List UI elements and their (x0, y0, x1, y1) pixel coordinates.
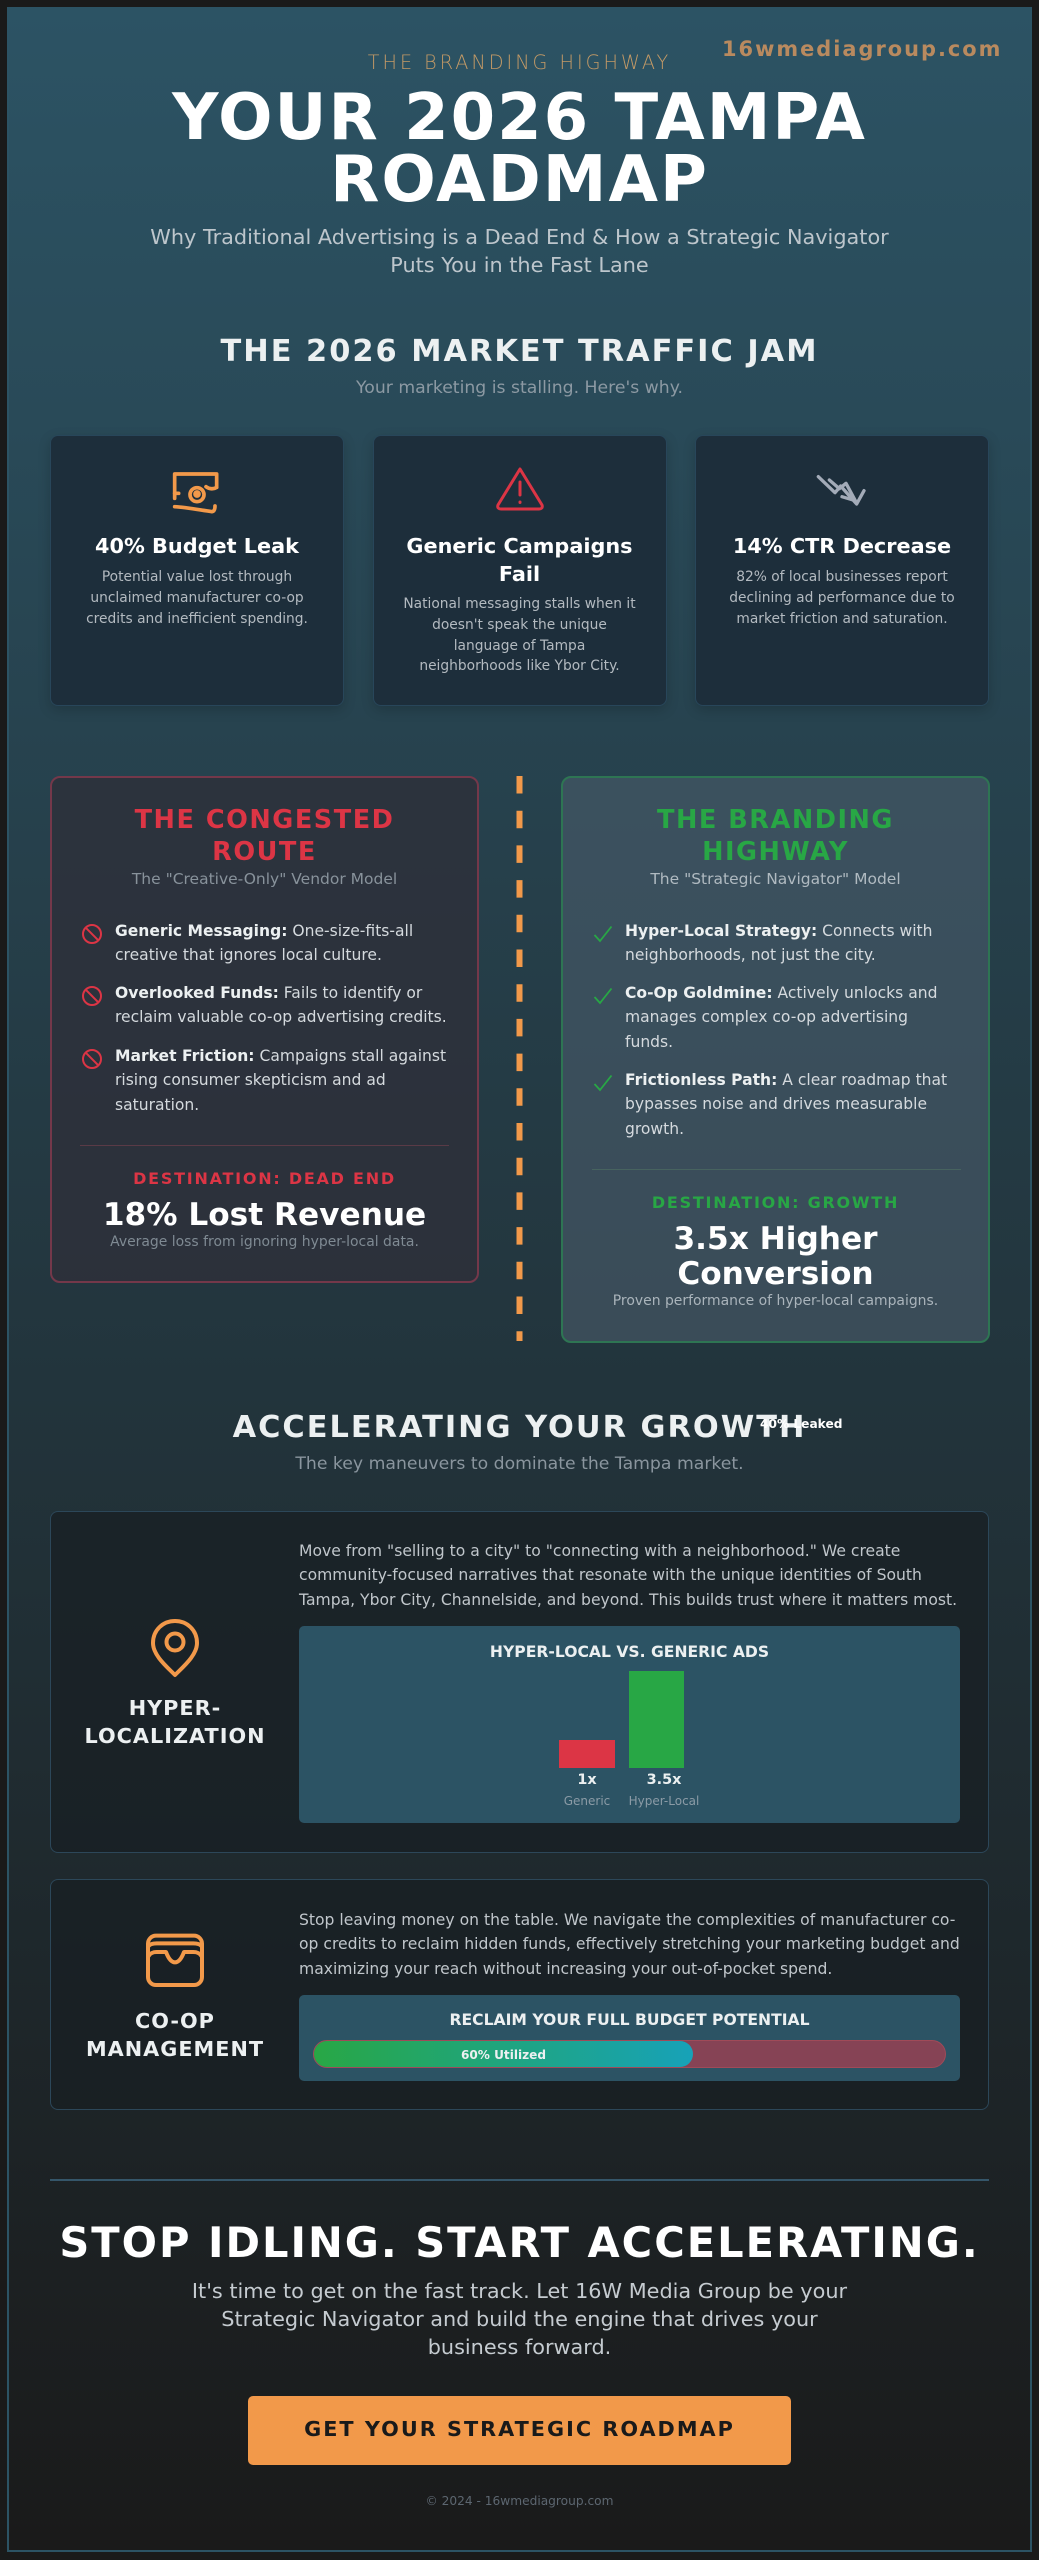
item text: growth. (625, 1120, 684, 1138)
item text: manages complex co-op advertising (625, 1008, 908, 1026)
item text: Overlooked Funds: Fails to identify or (115, 984, 422, 1002)
maneuver text: op credits to reclaim hidden funds, effectively stretching your marketing budget and (299, 1935, 960, 1953)
panel title (134, 805, 394, 866)
maneuver label: MANAGEMENT (86, 2036, 264, 2060)
card title: 40% Budget Leak (95, 534, 299, 558)
axis label: hyper-local: Hyper-Local (629, 1794, 699, 1808)
icon: warning triangle (496, 467, 544, 510)
card text: unclaimed manufacturer co-op (90, 590, 304, 606)
card text (86, 569, 308, 627)
maneuver text: Tampa, Ybor City, Channelside, and beyond. This builds trust where it matters most. (299, 1591, 957, 1609)
destination stat: 18% Lost Revenue (103, 1197, 426, 1233)
item text: funds. (625, 1033, 673, 1051)
CTA heading: STOP IDLING. START ACCELERATING. (59, 2218, 980, 2267)
chart title: HYPER-LOCAL VS. GENERIC ADS (490, 1643, 769, 1661)
CTA text (192, 2279, 848, 2359)
item text: rising consumer skepticism and ad (115, 1071, 386, 1089)
CTA rule (50, 2179, 989, 2181)
main title: ROADMAP (330, 143, 709, 217)
icon: location pin (151, 1619, 199, 1678)
panel title (657, 805, 894, 866)
main title: YOUR 2026 TAMPA (172, 81, 867, 155)
bar chart (299, 1626, 960, 1823)
item text: creative that ignores local culture. (115, 946, 382, 964)
subtitle: Puts You in the Fast Lane (390, 253, 649, 277)
panel title: HIGHWAY (702, 836, 849, 866)
card title: 14% CTR Decrease (733, 534, 951, 558)
destination stat: 3.5x Higher (673, 1221, 878, 1257)
destination label: DESTINATION: GROWTH (652, 1193, 899, 1212)
item text (625, 922, 932, 964)
main title (172, 81, 867, 217)
card text: language of Tampa (454, 638, 585, 654)
stray bar label: 40% Leaked (760, 1417, 842, 1431)
destination stat: Conversion (677, 1256, 874, 1292)
subheading: accelerating growth: The key maneuvers to dominate the Tampa market. (295, 1454, 744, 1474)
icon: wallet (146, 1934, 204, 1987)
icon: check (594, 1075, 612, 1092)
panel title: ROUTE (212, 836, 317, 866)
chart title: RECLAIM YOUR FULL BUDGET POTENTIAL (449, 2011, 810, 2029)
icon: check (594, 926, 612, 942)
heading: market traffic jam: THE 2026 MARKET TRAFFIC JAM (221, 334, 818, 369)
card text: credits and inefficient spending. (86, 611, 308, 627)
panel subtitle: The "Creative-Only" Vendor Model (132, 870, 397, 888)
panel: budget leak (50, 435, 344, 706)
destination label: DESTINATION: DEAD END (133, 1169, 396, 1188)
maneuver text (299, 1911, 960, 1978)
maneuver label (86, 2009, 264, 2060)
subtitle: Why Traditional Advertising is a Dead End & How a Strategic Navigator (150, 225, 889, 249)
item text: Co-Op Goldmine: Actively unlocks and (625, 984, 937, 1002)
panel title: THE BRANDING (657, 805, 894, 835)
card title: Fail (499, 562, 540, 586)
item text (115, 1047, 446, 1114)
card text: Potential value lost through (102, 569, 292, 585)
item text: neighborhoods, not just the city. (625, 946, 876, 964)
axis label: generic: Generic (564, 1794, 610, 1808)
icon: leaking cash (172, 472, 219, 514)
CTA text: business forward. (428, 2335, 611, 2359)
bar: hyper-local (629, 1671, 684, 1768)
item text: Hyper-Local Strategy: Connects with (625, 922, 932, 940)
value: generic: 1x (577, 1772, 597, 1788)
panel title: THE CONGESTED (135, 805, 394, 835)
item text (115, 984, 447, 1026)
list item: hyper-local strategy (594, 922, 932, 964)
list item: frictionless path (594, 1071, 947, 1138)
budget progress chart (299, 1995, 960, 2081)
heading: accelerating growth: ACCELERATING YOUR GROWTH (233, 1410, 806, 1445)
subheading: market traffic jam: Your marketing is stalling. Here's why. (356, 378, 683, 398)
eyebrow: THE BRANDING HIGHWAY (368, 51, 671, 74)
panel: hyper-localization (50, 1511, 989, 1853)
CTA button (248, 2396, 791, 2465)
card text (729, 569, 955, 627)
maneuver label (84, 1696, 266, 1748)
value: hyper-local: 3.5x (647, 1772, 681, 1788)
card text: market friction and saturation. (736, 611, 948, 627)
maneuver text (298, 1542, 957, 1609)
list item: co-op goldmine (594, 984, 937, 1051)
card text: 82% of local businesses report (736, 569, 948, 585)
icon: check (594, 988, 612, 1004)
list item: generic messaging (82, 922, 413, 964)
CTA button: GET YOUR STRATEGIC ROADMAP (304, 2417, 735, 2441)
list item: overlooked funds (82, 984, 447, 1026)
maneuver text: Stop leaving money on the table. We navigate the complexities of manufacturer co- (299, 1911, 955, 1929)
progress track (313, 2040, 946, 2068)
maneuver label: LOCALIZATION (84, 1724, 266, 1748)
website label: 16wmediagroup.com (722, 37, 1002, 61)
item text (625, 984, 937, 1051)
item text (625, 1071, 947, 1138)
card text: neighborhoods like Ybor City. (419, 658, 620, 674)
card text: declining ad performance due to (729, 590, 955, 606)
maneuver text: community-focused narratives that resonate with the unique identities of South (299, 1566, 922, 1584)
maneuver text: maximizing your reach without increasing your out-of-pocket spend. (299, 1960, 832, 1978)
item text: Frictionless Path: A clear roadmap that (625, 1071, 947, 1089)
progress fill: 60% Utilized (461, 2048, 546, 2062)
icon: prohibited (82, 986, 102, 1006)
panel: congested route (50, 776, 479, 1283)
destination stat (673, 1221, 878, 1292)
maneuver label: CO-OP (135, 2009, 215, 2033)
card title (406, 534, 633, 586)
header (150, 51, 889, 277)
item text: Generic Messaging: One-size-fits-all (115, 922, 413, 940)
list item: market friction (82, 1047, 446, 1114)
maneuver label: HYPER- (129, 1696, 221, 1720)
item text (115, 922, 413, 964)
destination note: Average loss from ignoring hyper-local data. (110, 1234, 419, 1250)
item text: Market Friction: Campaigns stall against (115, 1047, 446, 1065)
panel: generic campaigns (372, 435, 666, 706)
panel: branding highway (561, 776, 990, 1343)
card text (403, 596, 636, 674)
maneuver text: Move from "selling to a city" to "connecting with a neighborhood." We create (299, 1542, 900, 1560)
panel subtitle: The "Strategic Navigator" Model (650, 870, 901, 888)
item text: bypasses noise and drives measurable (625, 1095, 927, 1113)
icon: prohibited (82, 1049, 102, 1069)
icon: prohibited (82, 924, 102, 944)
footer: © 2024 - 16wmediagroup.com (426, 2494, 613, 2508)
dashed road divider (516, 776, 522, 1341)
card text: National messaging stalls when it (403, 596, 636, 612)
progress fill (314, 2041, 693, 2067)
card text: doesn't speak the unique (432, 617, 607, 633)
subtitle (150, 225, 889, 277)
CTA text: It's time to get on the fast track. Let 16W Media Group be your (192, 2279, 847, 2303)
icon: falling trend (816, 474, 866, 506)
CTA text: Strategic Navigator and build the engine that drives your (221, 2307, 818, 2331)
bar: generic (559, 1740, 615, 1768)
item text: reclaim valuable co-op advertising credits. (115, 1008, 447, 1026)
panel: co-op management (50, 1879, 989, 2110)
destination note: Proven performance of hyper-local campaigns. (613, 1293, 938, 1309)
panel: CTR decrease (695, 435, 989, 706)
item text: saturation. (115, 1096, 199, 1114)
card title: Generic Campaigns (406, 534, 633, 558)
